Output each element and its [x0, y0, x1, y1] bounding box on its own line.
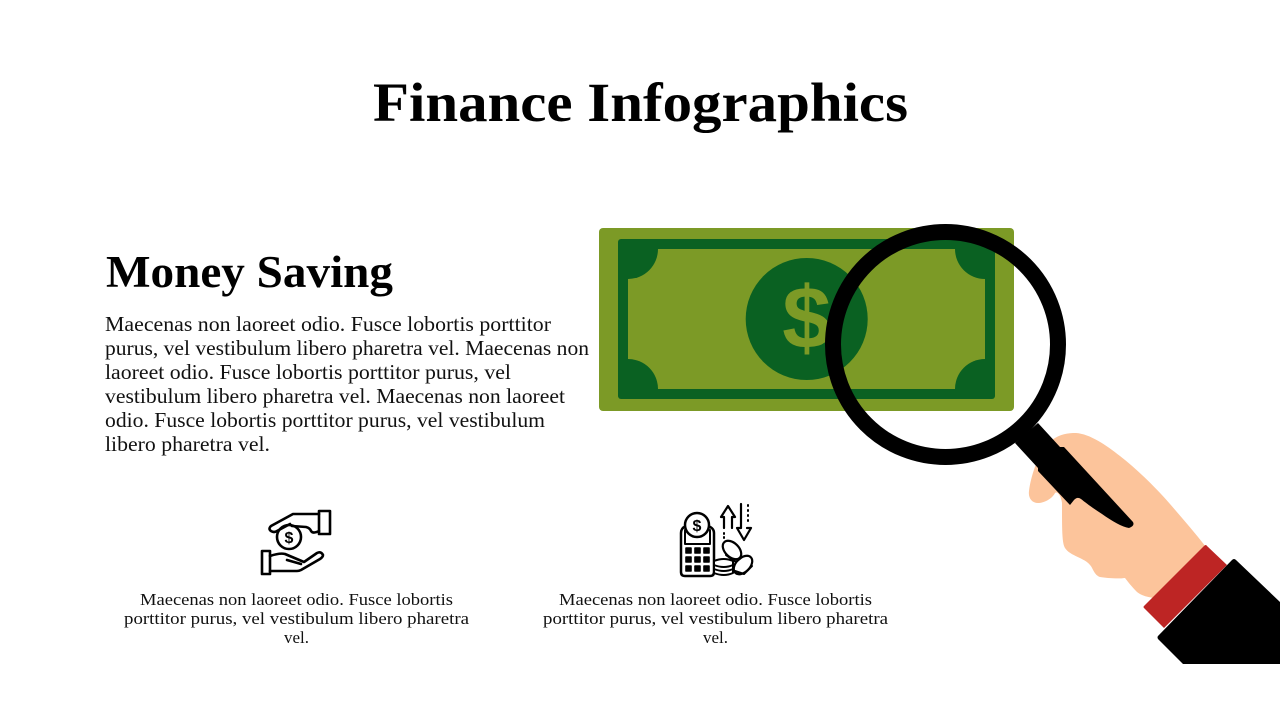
heading: money saving: Money Saving [106, 247, 394, 297]
body paragraph: libero pharetra vel. [105, 432, 270, 456]
caption: left icon [124, 590, 469, 647]
icon: hands exchanging coin [262, 511, 330, 574]
caption: left icon: porttitor purus, vel vestibulum libero pharetra [124, 609, 469, 628]
hand [1029, 433, 1206, 598]
caption: right icon: porttitor purus, vel vestibulum libero pharetra [543, 609, 888, 628]
banknote illustration [599, 228, 1014, 411]
title: Finance Infographics [373, 72, 908, 133]
caption: right icon: vel. [703, 628, 728, 647]
hand holding magnifier [833, 232, 1280, 664]
body paragraph [105, 312, 589, 456]
body paragraph: Maecenas non laoreet odio. Fusce lobortis porttitor [105, 312, 551, 336]
caption: right icon: Maecenas non laoreet odio. Fusce lobortis [559, 590, 872, 609]
text block: money saving [105, 247, 589, 456]
body paragraph: vestibulum libero pharetra vel. Maecenas non laoreet [105, 384, 565, 408]
banknote illustration: $ [782, 268, 831, 367]
magnifier lens ring [833, 232, 1058, 457]
black sleeve [1158, 559, 1280, 664]
icon: hands exchanging coin: $ [285, 530, 294, 547]
icon: calculator, coins and arrows [681, 504, 756, 578]
caption: right icon [543, 590, 888, 647]
icon: calculator, coins and arrows: $ [693, 518, 702, 535]
magnifier handle [1015, 423, 1134, 528]
red shirt cuff [1144, 545, 1227, 628]
caption: left icon: vel. [284, 628, 309, 647]
body paragraph: purus, vel vestibulum libero pharetra vel. Maecenas non [105, 336, 589, 360]
body paragraph: laoreet odio. Fusce lobortis porttitor purus, vel [105, 360, 511, 384]
body paragraph: odio. Fusce lobortis porttitor purus, vel vestibulum [105, 408, 545, 432]
caption: left icon: Maecenas non laoreet odio. Fusce lobortis [140, 590, 453, 609]
